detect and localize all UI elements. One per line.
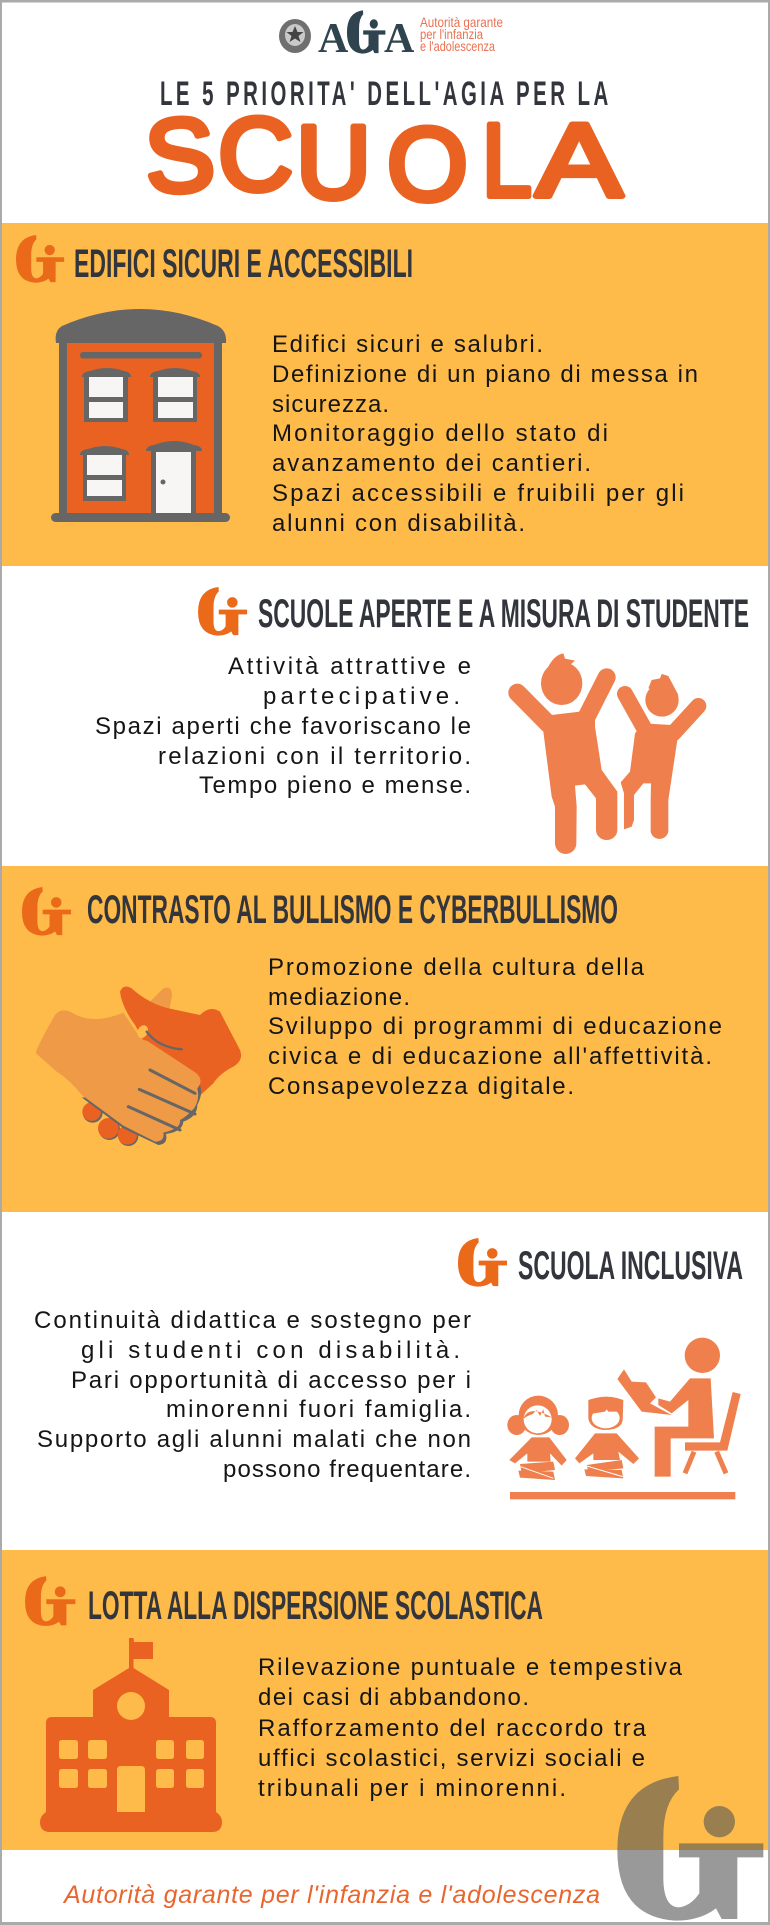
logo wordmark: A: [384, 16, 415, 62]
icon: handshake: [36, 986, 241, 1146]
title: scuola: L: [482, 102, 532, 219]
text block: partecipative.: [263, 683, 460, 710]
text block: tribunali per i minorenni.: [258, 1775, 566, 1802]
text block: minorenni fuori famiglia.: [166, 1396, 471, 1423]
text block: Consapevolezza digitale.: [268, 1073, 574, 1100]
icon: logo: [198, 587, 247, 636]
text block: uffici scolastici, servizi sociali e: [258, 1745, 645, 1772]
icon: children: [517, 653, 698, 854]
logo tagline: e l'adolescenza: [420, 38, 495, 54]
text block: possono frequentare.: [223, 1456, 471, 1483]
text block: Pari opportunità di accesso per i: [71, 1367, 471, 1394]
text block: relazioni con il territorio.: [158, 743, 471, 770]
text block: Spazi aperti che favoriscano le: [95, 713, 471, 740]
footer text: Autorità garante per l'infanzia e l'adolescenza: [62, 1881, 600, 1909]
text block: sicurezza.: [272, 391, 389, 418]
title: scuola: O: [387, 107, 468, 223]
icon: logo: [16, 235, 64, 283]
text block: Spazi accessibili e fruibili per gli: [272, 480, 684, 507]
text block: Monitoraggio dello stato di: [272, 420, 608, 447]
title: scuola: S: [142, 96, 217, 216]
icon: building: [51, 309, 230, 522]
text block: Continuità didattica e sostegno per: [34, 1307, 471, 1334]
panel: scuola inclusiva: [34, 1238, 743, 1499]
title: scuola: C: [218, 97, 293, 213]
title: LE 5 PRIORITA' DELL'AGIA PER LA: [160, 75, 608, 112]
icon: logo: [458, 1238, 507, 1287]
text block: [258, 1654, 683, 1802]
text block: gli studenti con disabilità.: [81, 1337, 460, 1364]
header logo: [279, 10, 503, 62]
text block: Attività attrattive e: [228, 653, 471, 680]
logo wordmark: A: [318, 16, 349, 62]
title: scuola: A: [536, 102, 622, 218]
text block: Edifici sicuri e salubri.: [272, 331, 543, 358]
heading: EDIFICI SICURI E ACCESSIBILI: [74, 242, 413, 286]
text block: Tempo pieno e mense.: [199, 772, 471, 799]
text block: Definizione di un piano di messa in: [272, 361, 698, 388]
panel: scuole aperte: [95, 587, 749, 854]
icon: logo: [22, 887, 71, 936]
panel: lotta alla dispersione: [0, 1550, 770, 1850]
logo tagline: Autorità garante: [420, 14, 503, 30]
logo tagline: per l'infanzia: [420, 26, 483, 42]
title: scuola: U: [296, 105, 371, 221]
icon: teacher and pupils: [507, 1338, 741, 1499]
panel: edifici sicuri: [0, 223, 770, 566]
title: scuola: [142, 96, 622, 223]
icon: school: [40, 1638, 222, 1832]
icon: logo: [25, 1576, 75, 1626]
text block: alunni con disabilità.: [272, 510, 525, 537]
text block: dei casi di abbandono.: [258, 1684, 529, 1711]
panel: contrasto al bullismo: [0, 866, 770, 1212]
text block: [34, 1307, 471, 1483]
text block: [272, 331, 698, 537]
text block: Rilevazione puntuale e tempestiva: [258, 1654, 683, 1681]
text block: civica e di educazione all'affettività.: [268, 1043, 712, 1070]
watermark logo: [617, 1776, 763, 1921]
logo wordmark: [318, 10, 415, 62]
text block: avanzamento dei cantieri.: [272, 450, 591, 477]
text block: Rafforzamento del raccordo tra: [258, 1715, 647, 1742]
text block: [95, 653, 471, 799]
logo tagline: [420, 14, 503, 54]
text block: mediazione.: [268, 984, 410, 1011]
icon: emblem: [279, 19, 311, 53]
text block: Sviluppo di programmi di educazione: [268, 1013, 722, 1040]
text block: [268, 954, 722, 1100]
text block: Supporto agli alunni malati che non: [37, 1426, 471, 1453]
text block: Promozione della cultura della: [268, 954, 645, 981]
